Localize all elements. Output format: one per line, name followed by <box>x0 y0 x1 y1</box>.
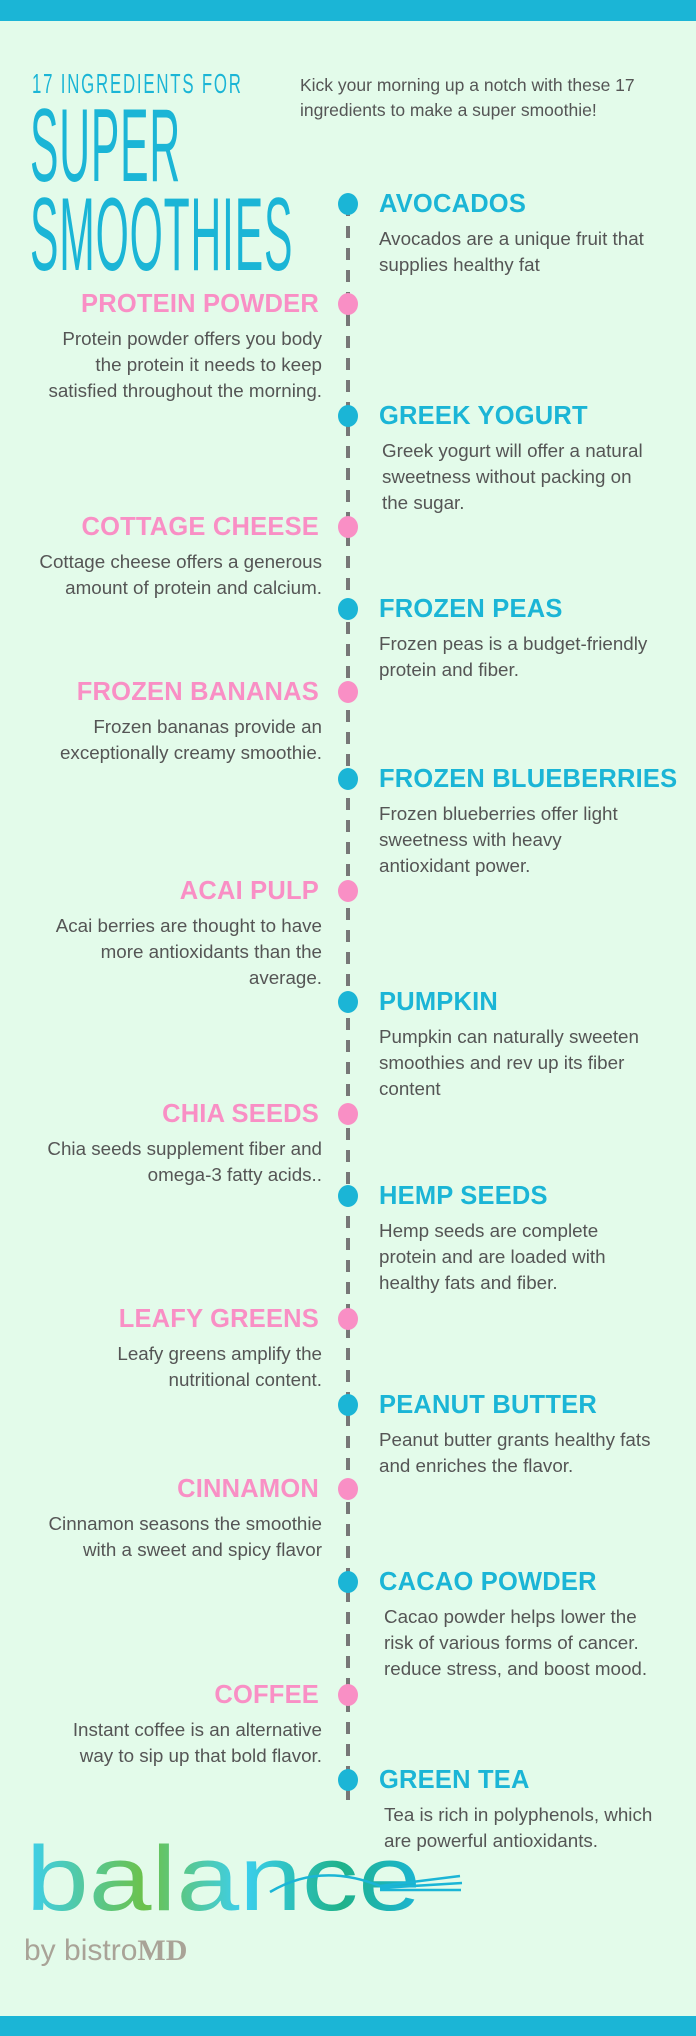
item: greek yogurt <box>379 402 643 513</box>
item: cinnamon: CINNAMON <box>177 1475 319 1503</box>
intro text: Kick your morning up a notch with these 17 ingredients to make a super smoothie! <box>300 75 635 120</box>
item: coffee: COFFEE <box>214 1681 319 1709</box>
item: coffee <box>73 1681 322 1766</box>
item: coffee: way to sip up that bold flavor. <box>80 1745 322 1766</box>
top bar <box>0 0 696 21</box>
item: cinnamon: Cinnamon seasons the smoothie <box>48 1513 322 1534</box>
item: hemp seeds: protein and are loaded with <box>379 1246 606 1267</box>
item: pumpkin <box>379 988 639 1099</box>
item: cacao powder: risk of various forms of cancer. <box>384 1632 639 1653</box>
item: greek yogurt: the sugar. <box>382 492 464 513</box>
item: chia seeds: omega-3 fatty acids.. <box>148 1164 322 1185</box>
item: protein powder: PROTEIN POWDER <box>81 290 319 318</box>
item: cinnamon <box>48 1475 322 1560</box>
item: avocados: AVOCADOS <box>379 190 526 218</box>
icon: fork swoosh <box>270 1875 462 1892</box>
timeline dashed line <box>346 204 350 1804</box>
item: chia seeds: CHIA SEEDS <box>162 1100 319 1128</box>
bottom bar <box>0 2016 696 2036</box>
item: green tea: are powerful antioxidants. <box>384 1830 598 1851</box>
byline: by bistroMD <box>24 1934 187 1967</box>
item: leafy greens <box>117 1305 322 1390</box>
item: coffee: Instant coffee is an alternative <box>73 1719 322 1740</box>
item: leafy greens: LEAFY GREENS <box>119 1305 319 1333</box>
item: acai pulp: Acai berries are thought to have <box>56 915 322 936</box>
item: cottage cheese: Cottage cheese offers a generous <box>39 551 322 572</box>
item: protein powder: Protein powder offers you body <box>62 328 322 349</box>
item: protein powder: satisfied throughout the morning. <box>48 380 322 401</box>
item: peanut butter <box>379 1391 650 1476</box>
item: hemp seeds <box>379 1182 606 1293</box>
item: green tea: Tea is rich in polyphenols, which <box>384 1804 652 1825</box>
item: cacao powder <box>379 1568 647 1679</box>
item: pumpkin: PUMPKIN <box>379 988 498 1016</box>
item: frozen blueberries <box>379 765 677 876</box>
item: acai pulp: ACAI PULP <box>180 877 319 905</box>
item: pumpkin: Pumpkin can naturally sweeten <box>379 1026 639 1047</box>
item: acai pulp <box>56 877 322 988</box>
title: 17 INGREDIENTS FOR <box>32 68 243 99</box>
item: hemp seeds: Hemp seeds are complete <box>379 1220 598 1241</box>
item: acai pulp: average. <box>249 967 322 988</box>
item: frozen peas: protein and fiber. <box>379 659 519 680</box>
item: protein powder <box>48 290 322 401</box>
item: peanut butter: Peanut butter grants healthy fats <box>379 1429 650 1450</box>
item: protein powder: the protein it needs to keep <box>95 354 322 375</box>
item: frozen blueberries: sweetness with heavy <box>379 829 562 850</box>
item: frozen peas <box>379 595 648 680</box>
item: acai pulp: more antioxidants than the <box>101 941 322 962</box>
item: hemp seeds: healthy fats and fiber. <box>379 1272 558 1293</box>
item: leafy greens: Leafy greens amplify the <box>117 1343 322 1364</box>
item: cottage cheese: COTTAGE CHEESE <box>81 513 319 541</box>
item: frozen peas: FROZEN PEAS <box>379 595 563 623</box>
title: SUPER <box>30 88 181 204</box>
item: frozen bananas: exceptionally creamy smoothie. <box>60 742 322 763</box>
item: greek yogurt: GREEK YOGURT <box>379 402 588 430</box>
item: frozen blueberries: antioxidant power. <box>379 855 530 876</box>
item: cacao powder: reduce stress, and boost mood. <box>384 1658 647 1679</box>
item: avocados: supplies healthy fat <box>379 254 540 275</box>
item: frozen bananas <box>60 678 322 763</box>
item: frozen bananas: FROZEN BANANAS <box>77 678 319 706</box>
title: SMOOTHIES <box>30 177 293 293</box>
item: greek yogurt: sweetness without packing on <box>382 466 632 487</box>
item: avocados: Avocados are a unique fruit that <box>379 228 644 249</box>
logo: balance by bistroMD <box>24 1840 462 1967</box>
item: frozen blueberries: FROZEN BLUEBERRIES <box>379 765 677 793</box>
item: cacao powder: CACAO POWDER <box>379 1568 597 1596</box>
item: chia seeds: Chia seeds supplement fiber and <box>47 1138 322 1159</box>
item: chia seeds <box>47 1100 322 1185</box>
item: pumpkin: content <box>379 1078 441 1099</box>
item: cottage cheese: amount of protein and calcium. <box>65 577 322 598</box>
item: avocados <box>379 190 644 275</box>
item: green tea: GREEN TEA <box>379 1766 530 1794</box>
item: frozen peas: Frozen peas is a budget-friendly <box>379 633 647 654</box>
item: leafy greens: nutritional content. <box>169 1369 322 1390</box>
item: cinnamon: with a sweet and spicy flavor <box>83 1539 322 1560</box>
item: greek yogurt: Greek yogurt will offer a natural <box>382 440 643 461</box>
item: frozen bananas: Frozen bananas provide an <box>93 716 322 737</box>
item: peanut butter: PEANUT BUTTER <box>379 1391 597 1419</box>
item: cacao powder: Cacao powder helps lower the <box>384 1606 637 1627</box>
dots <box>338 193 358 1791</box>
item: frozen blueberries: Frozen blueberries offer light <box>379 803 618 824</box>
item: green tea <box>379 1766 652 1851</box>
title <box>30 68 293 293</box>
item: peanut butter: and enriches the flavor. <box>379 1455 573 1476</box>
item: hemp seeds: HEMP SEEDS <box>379 1182 548 1210</box>
item: pumpkin: smoothies and rev up its fiber <box>379 1052 624 1073</box>
item: cottage cheese <box>39 513 322 598</box>
